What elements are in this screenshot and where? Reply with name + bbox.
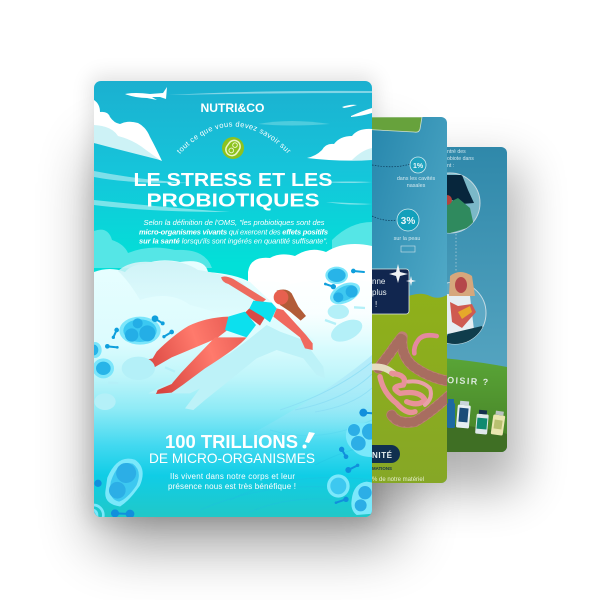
title [134,173,332,210]
footnote text: % de notre matériel [372,477,424,483]
pale cloud layer [118,261,247,296]
leg [135,317,228,367]
contour lines on the hill [270,362,372,432]
back card intro text: obiote dans [447,156,474,162]
dark callout box: ! [375,300,377,309]
product bottles [447,399,506,436]
stat: 3%: sur la peau [394,236,420,242]
sparkles [389,264,416,286]
panel: middle card [372,117,447,483]
definition paragraph [139,218,328,246]
teal background clouds [94,222,372,268]
back card intro text: ntré des [447,149,466,155]
stat: 1%: 1% [413,163,424,170]
dark callout box: nne [372,277,386,286]
bikini top [249,301,277,322]
illustration: woman's reflection [148,325,325,410]
white cloud bank [248,244,372,284]
arched tagline: tout ce que vous devez savoir sur [176,121,291,154]
hair [277,289,306,321]
microbe bottom left [83,505,103,525]
body text: présence nous est très bénéfique ! [168,482,296,491]
drop shadow of the card stack [91,76,520,542]
stat: 3%: 3% [401,216,415,227]
stat: 3% [394,209,420,252]
headline: 100 trillions: 100 TRILLIONS [165,431,298,452]
microbe mid right [327,474,350,498]
definition paragraph: micro-organismes vivants qui exercent des effets positifs [139,228,328,236]
green field [372,294,447,483]
microbe cluster left [119,317,161,345]
bikini bottom [225,312,256,337]
dark callout box [372,268,410,314]
icon: probiotic badge [222,137,244,159]
cloud: top left [94,100,162,161]
green hill [447,358,507,452]
microbes bottom [83,409,378,525]
back card intro text [447,149,474,167]
green banner [372,117,422,133]
illustration: intestine [370,335,452,422]
leg [156,337,247,394]
far arm [221,276,266,304]
panel: front card [94,81,372,517]
definition paragraph: Selon la définition de l'OMS, "les probiotiques sont des [144,218,325,227]
stat: 1%: nasales [407,183,426,189]
hill [258,355,372,430]
illustration: airplane [125,87,167,100]
head [274,290,288,305]
pale blobs [94,304,366,410]
stat: 1% [397,157,435,189]
stat: 1%: dans les cavités [397,176,435,182]
body text [168,472,296,491]
microbe cluster right [325,267,363,309]
dumbbell microbes [105,269,365,349]
dumbbell microbes [94,409,373,518]
streaks in the sky [94,91,372,212]
icon: exclamation mark [302,432,315,448]
white cloud glow right [250,280,372,335]
navy button [372,445,400,463]
illustration: floating woman [88,267,366,410]
dotted connector [456,234,457,270]
logo: NUTRI&CO [200,103,265,115]
microbe bottom right [351,482,377,515]
main cloud and sea body [94,260,372,517]
subheading: DE MICRO-ORGANISMES [149,450,315,466]
small clouds [342,105,372,117]
dotted lines [372,164,410,220]
back card heading: OISIR ? [447,375,488,387]
back card intro text: nt : [447,163,454,169]
microbe cluster left edge [88,342,114,378]
navy button: NITÉ [372,451,393,460]
body text: Ils vivent dans notre corps et leur [170,472,295,481]
small caption: MATIONS [372,466,392,471]
panel: back card [447,147,507,452]
microbe top right [346,422,378,457]
title: PROBIOTIQUES [146,190,320,210]
illustration: circle with mother and baby [447,272,486,344]
definition paragraph: sur la santé lorsqu'ils sont ingérés en quantité suffisante". [139,236,328,246]
cloud: top right [307,129,372,161]
microbe left [104,456,145,509]
near arm [273,308,313,350]
dark callout box: plus [372,288,387,297]
torso [244,308,265,326]
title: LE STRESS ET LES [134,169,332,190]
illustration: circle with woman in green [447,172,480,234]
